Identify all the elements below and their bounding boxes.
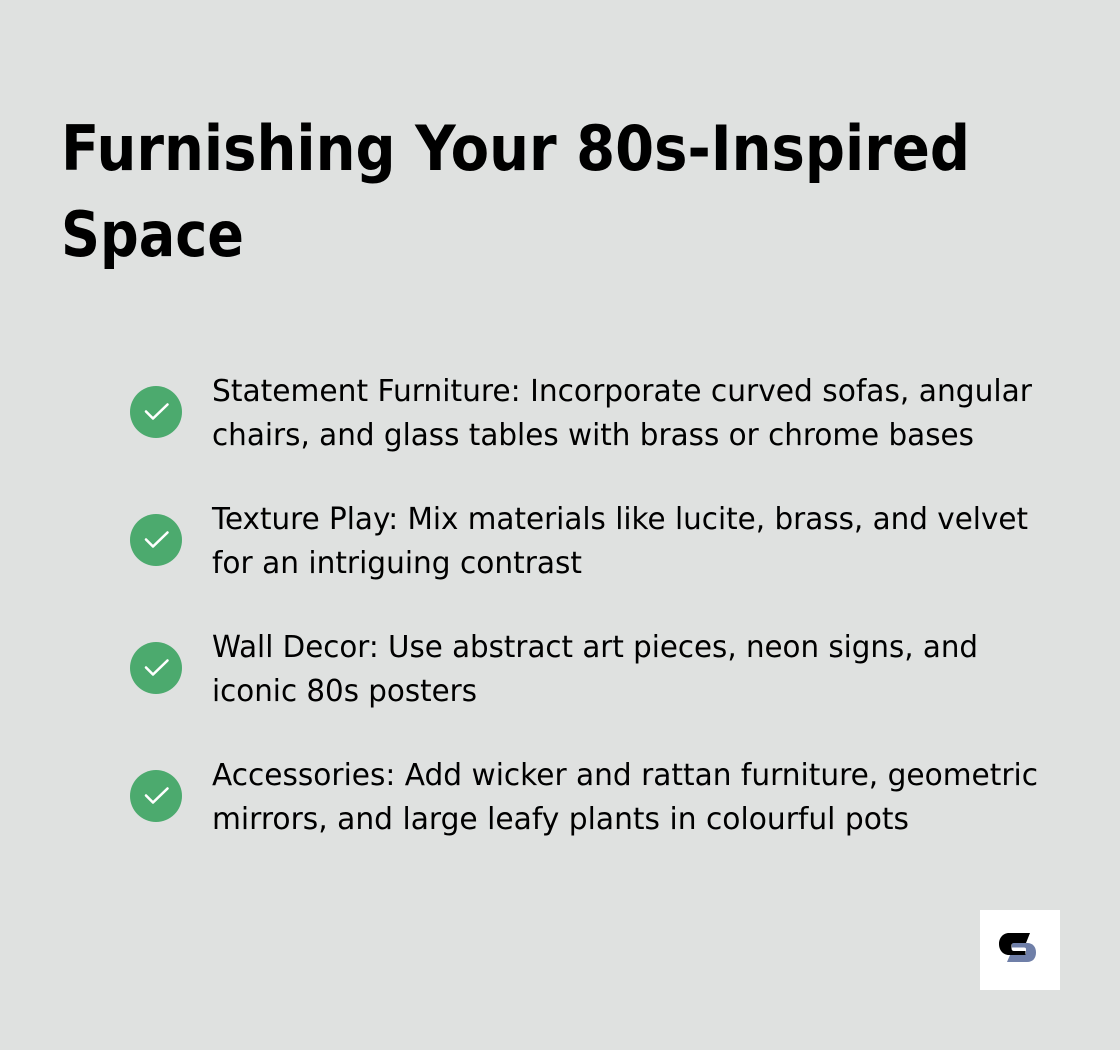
title: Space — [61, 198, 244, 271]
text: accessories: mirrors, and large leafy plants in colourful pots — [212, 802, 909, 837]
text: wall decor: Wall Decor: Use abstract art pieces, neon signs, and — [212, 630, 978, 665]
logo — [980, 910, 1060, 990]
text: texture play: for an intriguing contrast — [212, 546, 582, 581]
icon: check circle — [130, 386, 182, 438]
item: texture play — [130, 502, 1028, 581]
icon: check circle — [130, 770, 182, 822]
text: wall decor: iconic 80s posters — [212, 674, 477, 709]
text: accessories: Accessories: Add wicker and rattan furniture, geometric — [212, 758, 1038, 793]
item: accessories — [130, 758, 1038, 837]
item: statement furniture — [130, 374, 1032, 453]
title — [61, 112, 970, 271]
text: texture play — [211, 502, 1028, 581]
icon: check circle — [130, 514, 182, 566]
icon: check circle — [130, 642, 182, 694]
title: Furnishing Your 80s-Inspired — [61, 112, 970, 185]
text: statement furniture: Statement Furniture: Incorporate curved sofas, angular — [212, 374, 1032, 409]
text: accessories — [212, 758, 1038, 837]
checklist — [130, 374, 1038, 837]
text: statement furniture: chairs, and glass tables with brass or chrome bases — [212, 418, 974, 453]
text: wall decor — [212, 630, 978, 709]
text: statement furniture — [212, 374, 1032, 453]
item: wall decor — [130, 630, 978, 709]
text: texture play: Texture Play: Mix materials like lucite, brass, and velvet — [211, 502, 1028, 537]
